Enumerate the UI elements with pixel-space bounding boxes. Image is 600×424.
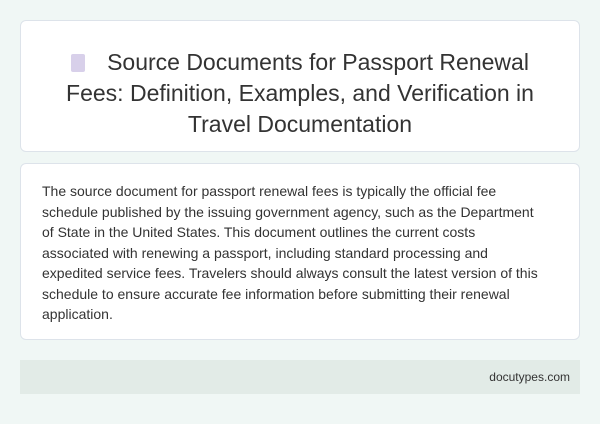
panel: title card <box>20 20 580 152</box>
text block: associated with renewing a passport, including standard processing and <box>42 244 488 260</box>
title: Fees: Definition, Examples, and Verification in <box>66 80 534 106</box>
text block: of State in the United States. This document outlines the current costs <box>42 224 475 240</box>
text block: expedited service fees. Travelers should always consult the latest version of this <box>42 265 538 281</box>
footer: docutypes.com <box>489 370 570 384</box>
title <box>66 49 534 137</box>
footer <box>20 360 580 394</box>
title: Source Documents for Passport Renewal <box>107 49 529 75</box>
text block: schedule to ensure accurate fee information before submitting their renewal <box>42 286 510 302</box>
icon: document <box>71 54 85 72</box>
text block: The source document for passport renewal fees is typically the official fee <box>42 183 496 199</box>
text block: schedule published by the issuing government agency, such as the Department <box>42 204 534 220</box>
panel: description <box>20 163 580 340</box>
title: Travel Documentation <box>188 111 412 137</box>
text block <box>42 183 538 322</box>
text block: application. <box>42 306 113 322</box>
